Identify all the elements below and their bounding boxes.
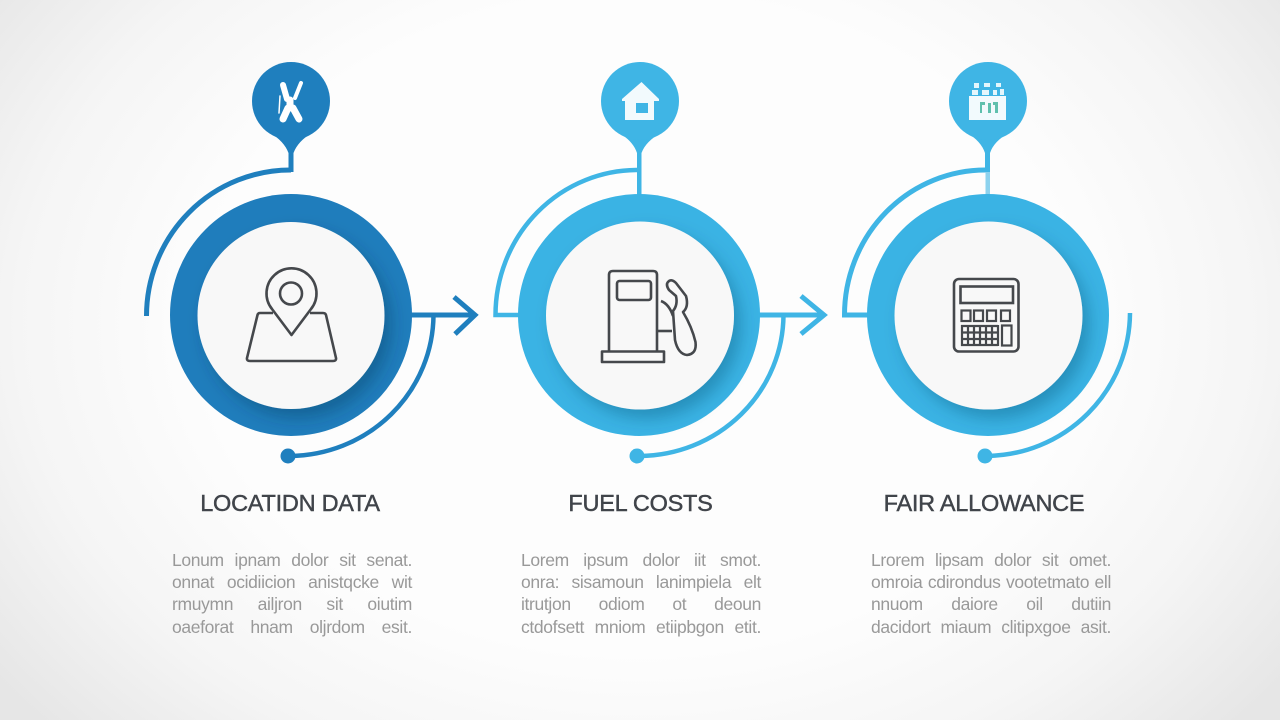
icon: calculator — [954, 279, 1018, 352]
top arc — [496, 170, 638, 315]
text block: rmuymn ailjron sit oiutim — [172, 594, 412, 614]
ring — [867, 194, 1109, 436]
heading: FUEL COSTS — [568, 490, 713, 516]
icon: box glyph — [969, 83, 1006, 120]
arrow — [758, 296, 824, 334]
lower arc — [280, 315, 434, 464]
ring — [518, 194, 760, 436]
pin badge — [949, 62, 1027, 196]
inner disc — [894, 222, 1082, 410]
text block: omroia cdirondus vootetmato ell — [871, 572, 1111, 592]
lower arc — [978, 313, 1130, 464]
text block: onnat ocidiicion anistqcke wit — [172, 572, 412, 592]
text block: Lorem ipsum dolor iit smot. — [521, 550, 761, 570]
text block — [172, 550, 412, 637]
icon: badge glyph — [279, 83, 301, 119]
top arc — [146, 170, 291, 316]
inner disc — [198, 222, 384, 409]
icon: fuel pump — [602, 271, 696, 362]
text block: nnuom daiore oil dutiin — [871, 594, 1111, 614]
ring — [170, 194, 412, 436]
panel: fuel costs — [493, 62, 828, 637]
text block: itrutjon odiom ot deoun — [521, 594, 761, 614]
top arc — [844, 170, 986, 315]
text block: onra: sisamoun lanimpiela elt — [521, 572, 761, 592]
icon: map pin — [247, 268, 336, 361]
inner disc — [546, 222, 734, 410]
icon: house — [622, 82, 659, 120]
text block: oaeforat hnam oljrdom esit. — [172, 617, 412, 637]
pin badge — [252, 62, 330, 172]
text block: Lonum ipnam dolor sit senat. — [172, 550, 412, 570]
heading: LOCATIDN DATA — [200, 490, 380, 516]
panel: fair allowance — [842, 62, 1132, 637]
text block: dacidort miaum clitipxgoe asit. — [871, 617, 1111, 637]
text block — [871, 550, 1111, 637]
pin badge — [601, 62, 679, 196]
arrow — [410, 297, 475, 334]
lower arc — [630, 315, 784, 464]
text block: ctdofsett mniom etiipbgon etit. — [521, 617, 761, 637]
text block: Lrorem lipsam dolor sit omet. — [871, 550, 1111, 570]
panel: location data — [144, 62, 479, 637]
text block — [521, 550, 762, 637]
heading: FAIR ALLOWANCE — [884, 490, 1084, 516]
